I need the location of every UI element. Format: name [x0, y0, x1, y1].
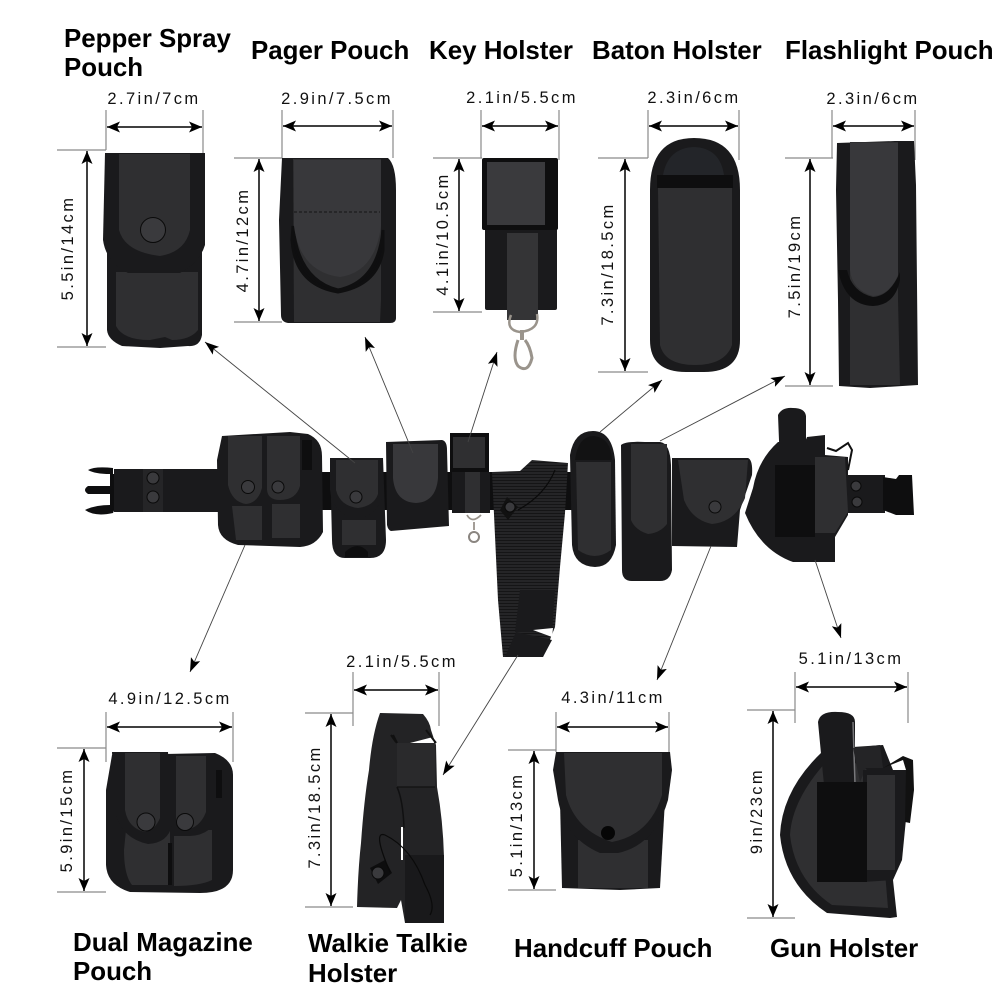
product: pager pouch — [279, 158, 396, 323]
heading: Pepper Spray Pouch: Pepper Spray — [64, 25, 231, 53]
belt: flashlight pouch — [621, 442, 672, 581]
heading: Baton Holster: Baton Holster — [592, 37, 762, 65]
arrow: to key holster — [468, 352, 497, 442]
arrow: to baton holster — [600, 380, 662, 432]
dimensions: gun holster — [747, 650, 908, 918]
dimensions: baton holster: 7.3in/18.5cm — [599, 202, 617, 326]
belt: key holster — [450, 433, 490, 542]
arrow: to dual magazine pouch — [190, 545, 245, 672]
product: pepper spray pouch — [103, 153, 205, 348]
arrow: to walkie talkie holster — [443, 655, 518, 775]
dimensions: pepper spray pouch — [57, 90, 203, 347]
right strap and buckle — [835, 475, 914, 515]
heading: Pepper Spray Pouch: Pouch — [64, 54, 143, 82]
belt: dual magazine pouch — [217, 432, 323, 547]
left buckle and strap — [85, 467, 220, 514]
dimensions: handcuff pouch: 4.3in/11cm — [561, 689, 665, 707]
heading: Handcuff Pouch: Handcuff Pouch — [514, 935, 712, 963]
heading: Dual Magazine Pouch: Pouch — [73, 958, 152, 986]
heading: Flashlight Pouch: Flashlight Pouch — [785, 37, 994, 65]
dimensions: flashlight pouch — [785, 90, 920, 386]
heading: Gun Holster: Gun Holster — [770, 935, 918, 963]
product: walkie talkie holster — [357, 713, 444, 923]
belt: baton holster — [570, 431, 616, 567]
arrow: to pepper spray pouch — [205, 342, 355, 463]
dimensions: gun holster: 5.1in/13cm — [799, 650, 903, 668]
product: flashlight pouch — [836, 141, 918, 388]
heading: Key Holster: Key Holster — [429, 37, 573, 65]
dimensions: baton holster: 2.3in/6cm — [647, 89, 741, 107]
arrow: to pager pouch — [365, 337, 413, 453]
dimensions: dual magazine pouch: 5.9in/15cm — [58, 768, 76, 872]
dimensions: walkie talkie holster: 7.3in/18.5cm — [306, 745, 324, 869]
arrow: to flashlight pouch — [660, 376, 785, 441]
arrow: to gun holster — [815, 560, 841, 638]
dimensions: pepper spray pouch: 5.5in/14cm — [59, 196, 77, 300]
center belt webbing — [320, 472, 590, 510]
dimensions: flashlight pouch: 2.3in/6cm — [826, 90, 920, 108]
heading: Walkie Talkie Holster: Walkie Talkie — [308, 930, 468, 958]
belt: pager pouch — [386, 440, 449, 531]
dimensions: handcuff pouch: 5.1in/13cm — [508, 773, 526, 877]
dimensions: handcuff pouch — [508, 689, 669, 890]
dimensions: dual magazine pouch — [57, 690, 233, 892]
belt assembly — [85, 408, 914, 657]
arrow: to handcuff pouch — [657, 546, 711, 680]
dimensions: walkie talkie holster: 2.1in/5.5cm — [346, 653, 458, 671]
dimensions: pager pouch: 2.9in/7.5cm — [281, 90, 393, 108]
product: handcuff pouch — [553, 752, 672, 890]
dimensions: gun holster: 9in/23cm — [748, 768, 766, 854]
dimensions: key holster: 2.1in/5.5cm — [466, 89, 578, 107]
belt: handcuff pouch — [672, 458, 752, 547]
product: gun holster — [780, 712, 914, 918]
dimensions: pager pouch: 4.7in/12cm — [234, 188, 252, 292]
product: key holster — [482, 158, 558, 369]
dimensions: pager pouch — [234, 90, 393, 322]
dimensions: flashlight pouch: 7.5in/19cm — [786, 214, 804, 318]
product: baton holster — [650, 138, 740, 372]
dimensions: key holster: 4.1in/10.5cm — [434, 172, 452, 296]
dimensions: dual magazine pouch: 4.9in/12.5cm — [108, 690, 232, 708]
dimensions: walkie talkie holster — [305, 653, 458, 907]
belt: pepper spray pouch — [330, 458, 386, 558]
heading: Walkie Talkie Holster: Holster — [308, 960, 397, 988]
dimensions: pepper spray pouch: 2.7in/7cm — [107, 90, 201, 108]
belt: walkie talkie holster — [492, 460, 568, 657]
heading: Dual Magazine Pouch: Dual Magazine — [73, 929, 253, 957]
heading: Pager Pouch: Pager Pouch — [251, 37, 409, 65]
belt: gun holster — [745, 408, 852, 562]
product: dual magazine pouch — [106, 752, 233, 893]
dimensions: key holster — [433, 89, 578, 312]
dimensions: baton holster — [598, 89, 741, 372]
